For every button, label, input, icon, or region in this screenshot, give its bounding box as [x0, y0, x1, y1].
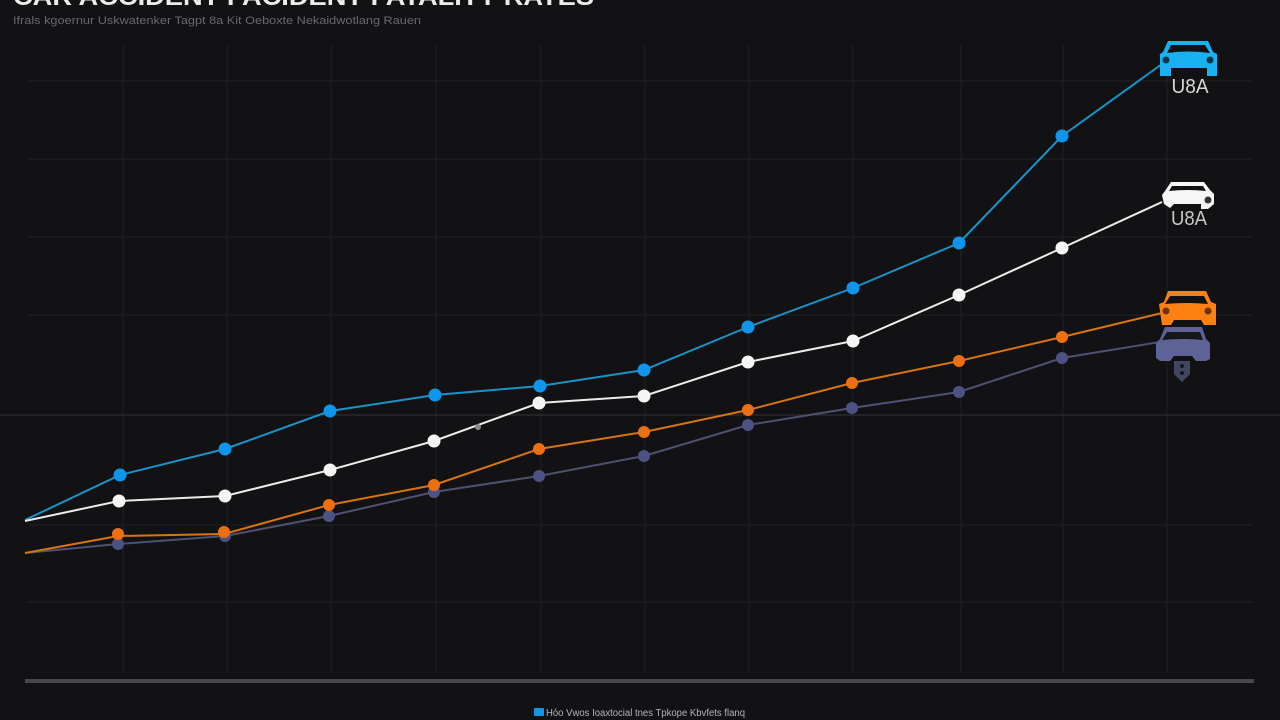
subtitle: Ifrals kgoernur Uskwatenker Tagpt 8a Kit Oeboxte Nekaidwotlang Rauen	[13, 15, 421, 27]
icon: white car	[1162, 182, 1214, 209]
label: blue car: U8A	[1172, 76, 1209, 98]
legend	[534, 708, 745, 719]
icon: slate car	[1156, 327, 1210, 382]
series: blue line	[25, 64, 1162, 520]
legend swatch	[534, 708, 544, 716]
series: orange line	[25, 313, 1162, 553]
line chart	[25, 64, 1162, 553]
series: white line	[25, 202, 1162, 521]
label: white car: U8A	[1171, 208, 1208, 230]
icon: blue car	[1160, 41, 1217, 76]
x axis	[25, 679, 1254, 683]
series: slate line	[25, 342, 1160, 553]
legend text: Hóo Vwos Ioaxtocial tnes Tpkope Kbvfets flanq	[546, 708, 745, 719]
icon: orange car	[1159, 291, 1216, 325]
